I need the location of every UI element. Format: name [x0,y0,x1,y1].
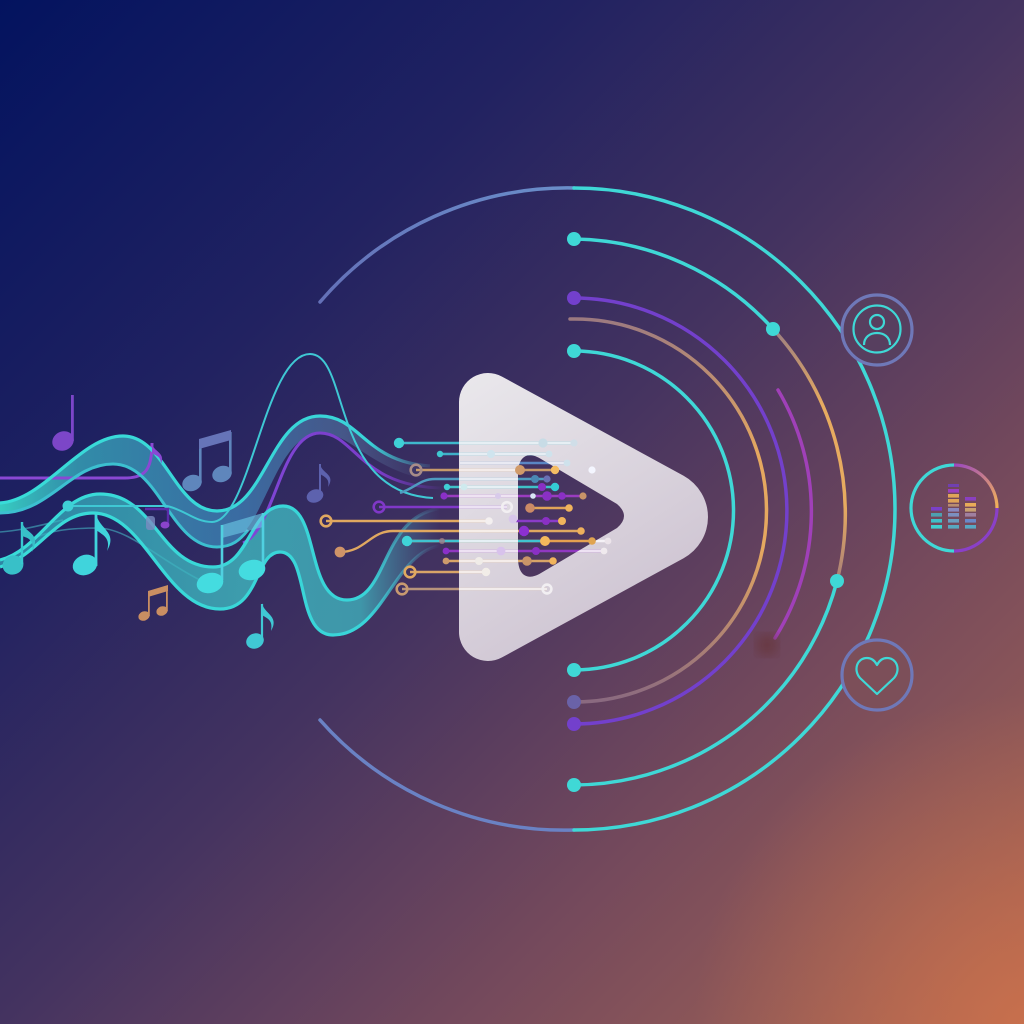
concentric arcs [320,188,895,830]
note: teal eighth left [0,522,35,578]
tan arc [570,319,767,702]
thin wave lines [0,520,200,580]
pale segments across the triangle [459,442,605,590]
second teal arc bottom [574,581,837,785]
outer arc right half [574,188,895,830]
note: purple quarter [49,395,77,454]
ribbon A lower edge [0,464,248,547]
arc end dots [567,232,844,792]
icon: equalizer ring [911,465,997,551]
ribbon A upper edge [0,416,430,511]
second teal arc top [574,239,773,329]
inner teal arc [574,351,734,670]
note: large pale beamed pair [194,513,268,596]
note: periwinkle eighth [305,464,330,505]
ribbon B upper edge [0,494,447,600]
music notes [0,395,330,651]
purple arc [574,298,787,724]
ring segments [911,465,997,551]
ring nodes [321,465,551,594]
note: teal eighth large [70,514,111,579]
play button triangle [459,373,708,661]
staff dot [62,500,74,512]
note: blue beamed pair [180,430,234,494]
outer arc left half [320,188,574,830]
magenta short arc [775,390,811,638]
icon: user profile [842,295,912,365]
data lines converging into the play button [321,438,611,594]
note: teal eighth bottom [244,603,274,651]
equalizer bars [931,484,976,529]
note: small purple flag on staff [152,443,162,464]
purple stream line [243,433,445,543]
purple staff line [0,443,152,478]
wave ribbons and thin lines [0,354,447,635]
note: ghost purple note on wave [145,509,170,530]
glow streak [555,469,592,471]
ribbon B lower edge [0,513,447,635]
colored line segments [326,443,604,589]
icon: heart [842,640,912,710]
ribbon B fill [0,494,447,635]
ribbon A fill [0,416,430,547]
blurred dark spot [756,634,778,656]
tall thin peak line [68,354,433,522]
solid nodes [335,438,611,576]
note: orange beamed pair [137,585,169,622]
second arc orange section [773,329,845,581]
